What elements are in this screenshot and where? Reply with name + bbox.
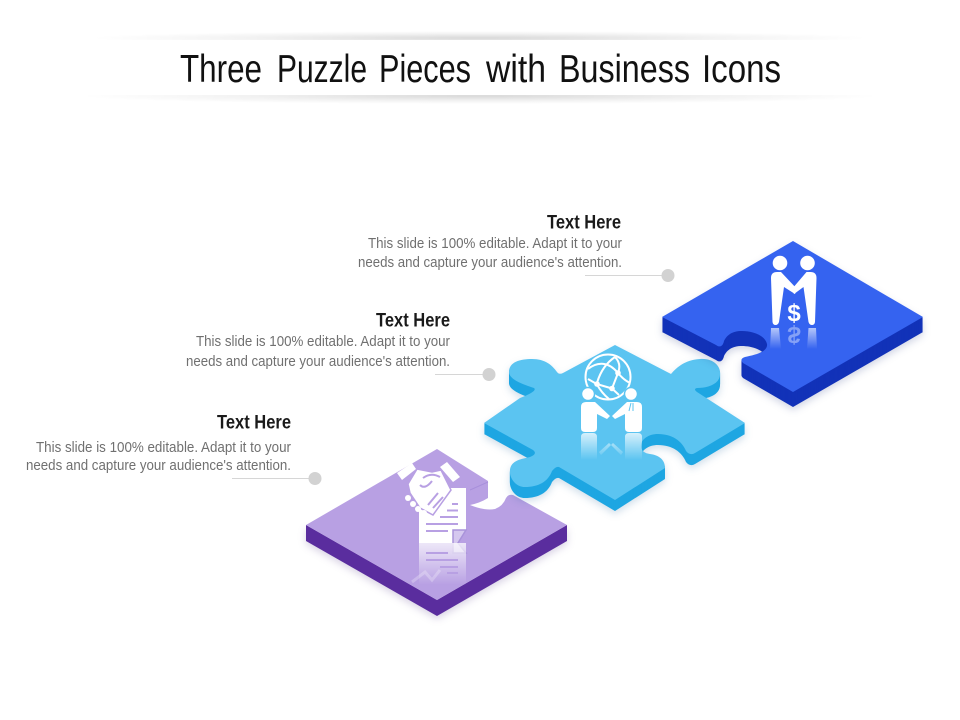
puzzle piece: blue bbox=[662, 241, 923, 407]
callout: top bbox=[358, 212, 674, 282]
callout: bottom bbox=[26, 412, 322, 485]
icon: two people with dollar sign: $ bbox=[787, 300, 801, 327]
title: Puzzle bbox=[277, 48, 367, 91]
icon: handshake and document bbox=[397, 462, 466, 585]
title: Business bbox=[559, 48, 690, 91]
icon reflection bbox=[581, 433, 642, 460]
title: with bbox=[485, 48, 546, 91]
callout: middle: needs and capture your audience's attention. bbox=[186, 353, 450, 370]
icon: globe and two people bbox=[581, 354, 642, 460]
callout: top: needs and capture your audience's attention. bbox=[358, 254, 622, 271]
title bbox=[180, 48, 781, 91]
callout: middle bbox=[186, 310, 496, 381]
callout: top: This slide is 100% editable. Adapt it to your bbox=[368, 235, 622, 252]
title: Three bbox=[180, 48, 262, 91]
title: Pieces bbox=[379, 48, 471, 91]
title band bbox=[60, 31, 900, 104]
puzzle piece: cyan bbox=[484, 345, 745, 511]
callout: bottom: Text Here bbox=[217, 412, 291, 434]
callout: bottom: needs and capture your audience's attention. bbox=[26, 457, 291, 474]
callout: bottom: This slide is 100% editable. Adapt it to your bbox=[36, 439, 291, 456]
title: Icons bbox=[702, 48, 781, 91]
puzzle piece: purple bbox=[306, 449, 567, 616]
callout: middle: This slide is 100% editable. Adapt it to your bbox=[196, 333, 450, 350]
callout: top: Text Here bbox=[547, 212, 621, 234]
icon reflection: $ bbox=[787, 321, 801, 348]
icon: two people with dollar sign bbox=[770, 256, 817, 349]
callout: middle: Text Here bbox=[376, 310, 450, 332]
icon reflection bbox=[412, 543, 466, 585]
